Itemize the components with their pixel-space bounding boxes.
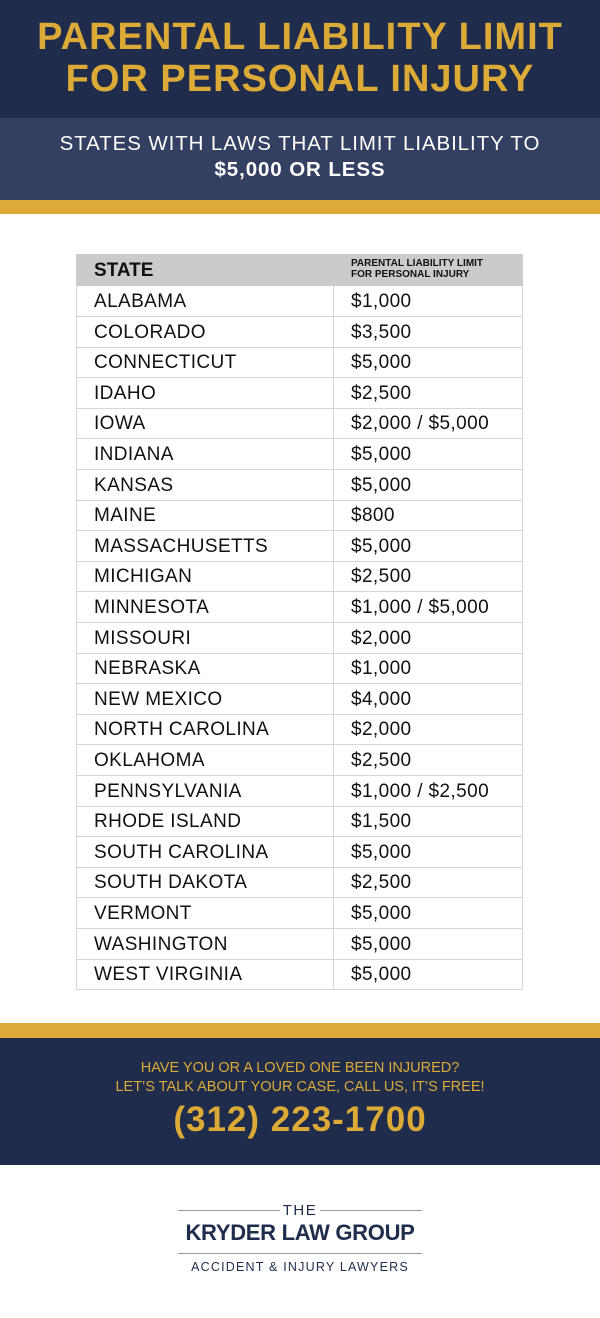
call to action: LET’S TALK ABOUT YOUR CASE, CALL US, IT’S FREE! (115, 1079, 485, 1095)
table: IDAHO (94, 383, 156, 404)
table header: PARENTAL LIABILITY LIMIT (351, 258, 483, 269)
table: SOUTH DAKOTA (94, 872, 247, 893)
table: $4,000 (351, 689, 412, 710)
call to action (0, 1038, 600, 1165)
table: $2,500 (351, 872, 412, 893)
table: $2,000 (351, 628, 412, 649)
title band: FOR PERSONAL INJURY (66, 58, 534, 100)
table: NORTH CAROLINA (94, 719, 269, 740)
table: CONNECTICUT (94, 352, 237, 373)
table: $5,000 (351, 964, 412, 985)
table header: STATE (94, 260, 153, 281)
subtitle band: $5,000 OR LESS (214, 158, 386, 181)
table: $2,500 (351, 750, 412, 771)
title band: PARENTAL LIABILITY LIMIT (37, 16, 563, 58)
table: RHODE ISLAND (94, 811, 241, 832)
table: MAINE (94, 505, 156, 526)
logo (178, 1202, 422, 1274)
subtitle band (0, 118, 600, 200)
table: COLORADO (94, 322, 206, 343)
table: $1,000 / $2,500 (351, 781, 489, 802)
table: WASHINGTON (94, 934, 228, 955)
title band (0, 0, 600, 118)
table: MICHIGAN (94, 566, 192, 587)
table: $5,000 (351, 842, 412, 863)
phone number: (312) 223-1700 (173, 1100, 427, 1139)
table: $5,000 (351, 444, 412, 465)
logo: KRYDER LAW GROUP (185, 1220, 415, 1245)
table: IOWA (94, 413, 146, 434)
table: INDIANA (94, 444, 174, 465)
table: $5,000 (351, 536, 412, 557)
table: $5,000 (351, 934, 412, 955)
table: SOUTH CAROLINA (94, 842, 269, 863)
table: MASSACHUSETTS (94, 536, 268, 557)
table: $1,000 (351, 291, 412, 312)
table: KANSAS (94, 475, 174, 496)
table header (76, 254, 523, 286)
table: $3,500 (351, 322, 412, 343)
table: $5,000 (351, 352, 412, 373)
table: MISSOURI (94, 628, 191, 649)
logo: ACCIDENT & INJURY LAWYERS (191, 1260, 409, 1274)
table: ALABAMA (94, 291, 187, 312)
table header: FOR PERSONAL INJURY (351, 269, 469, 280)
table: $1,000 / $5,000 (351, 597, 489, 618)
table: MINNESOTA (94, 597, 209, 618)
table: OKLAHOMA (94, 750, 205, 771)
table (76, 254, 523, 990)
table: $2,500 (351, 383, 412, 404)
table: NEBRASKA (94, 658, 201, 679)
table: $1,000 (351, 658, 412, 679)
table: VERMONT (94, 903, 192, 924)
table: WEST VIRGINIA (94, 964, 242, 985)
call to action: HAVE YOU OR A LOVED ONE BEEN INJURED? (141, 1060, 459, 1076)
table: $800 (351, 505, 395, 526)
table: $2,000 / $5,000 (351, 413, 489, 434)
table: $5,000 (351, 475, 412, 496)
table: $1,500 (351, 811, 412, 832)
table: $2,000 (351, 719, 412, 740)
table: $5,000 (351, 903, 412, 924)
table: $2,500 (351, 566, 412, 587)
table: NEW MEXICO (94, 689, 223, 710)
subtitle band: STATES WITH LAWS THAT LIMIT LIABILITY TO (60, 132, 540, 155)
logo: THE (283, 1202, 317, 1219)
table: PENNSYLVANIA (94, 781, 242, 802)
